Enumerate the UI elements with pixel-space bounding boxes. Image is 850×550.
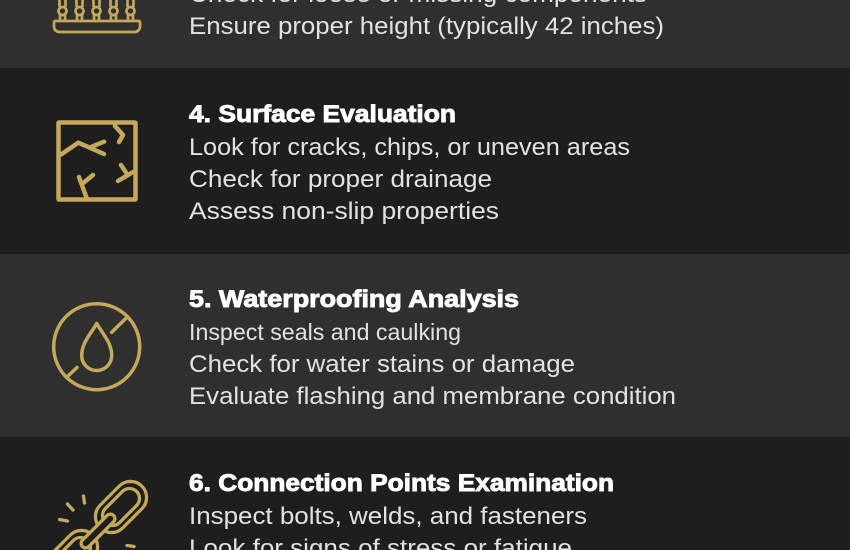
text: connection checks: Inspect bolts, welds, and fasteners <box>189 503 587 530</box>
text: surface checks <box>189 134 630 225</box>
panel: 6. connection points examination <box>0 437 850 550</box>
icon: railing <box>54 0 140 32</box>
text: waterproofing checks: Check for water stains or damage <box>189 351 575 378</box>
icon: no water drop <box>54 304 140 390</box>
text: surface checks: Check for proper drainage <box>189 166 492 193</box>
icon: breaking chain <box>40 475 153 550</box>
heading: surface evaluation: 4. Surface Evaluation <box>189 101 456 128</box>
text: railing checks <box>189 0 664 40</box>
text: waterproofing checks: Inspect seals and caulking <box>189 319 461 345</box>
text: surface checks: Look for cracks, chips, or uneven areas <box>189 134 630 161</box>
heading: waterproofing analysis: 5. Waterproofing Analysis <box>189 286 519 313</box>
text: waterproofing checks: Evaluate flashing and membrane condition <box>189 383 676 410</box>
icon: cracked surface <box>58 122 136 200</box>
panel: 3. railing inspection (partial) <box>0 0 850 68</box>
text: surface checks: Assess non-slip properties <box>189 198 499 225</box>
text: waterproofing checks <box>189 319 676 410</box>
text: railing checks: Ensure proper height (typically 42 inches) <box>189 13 664 40</box>
heading: connection points examination: 6. Connection Points Examination <box>189 470 614 497</box>
text: connection checks <box>189 503 587 550</box>
panel: 4. surface evaluation <box>0 68 850 254</box>
panel: 5. waterproofing analysis <box>0 254 850 437</box>
